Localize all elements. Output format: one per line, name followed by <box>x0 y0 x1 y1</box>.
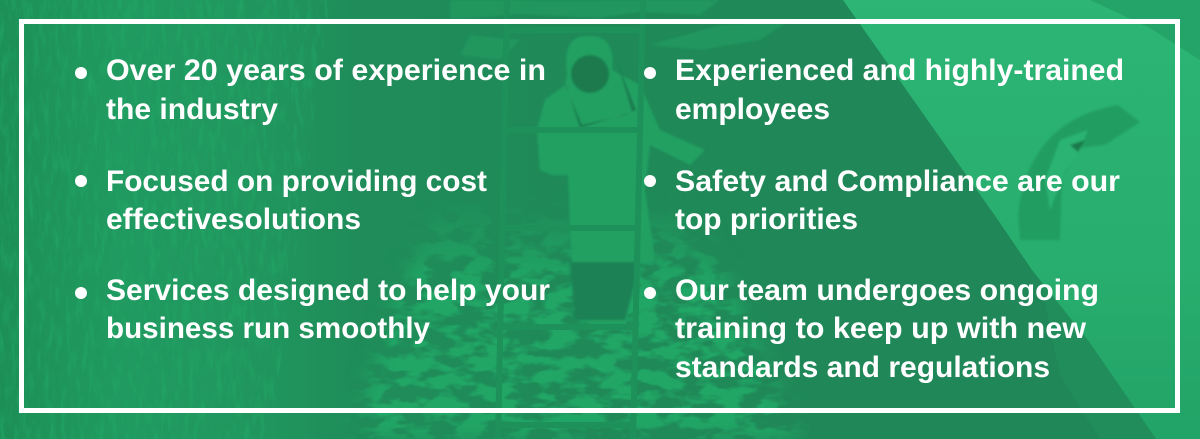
bullet: safety and compliance: top priorities <box>675 203 858 236</box>
bullet: services: business run smoothly <box>106 312 430 345</box>
hose stain <box>1018 105 1140 240</box>
bullet: safety and compliance <box>644 165 1120 236</box>
bullet: safety and compliance: Safety and Compliance are our <box>675 165 1120 198</box>
bullet: trained employees <box>644 54 1124 126</box>
concrete wall <box>843 0 1200 439</box>
bullet: 20 years experience <box>75 54 546 126</box>
bullet: ongoing training <box>644 274 1099 384</box>
bullet: ongoing training: Our team undergoes ongoing <box>675 274 1099 307</box>
left column of bullets <box>75 54 550 345</box>
bullet: ongoing training: training to keep up with new <box>675 312 1087 345</box>
bullet: 20 years experience: Over 20 years of experience in <box>106 54 546 87</box>
bullet: trained employees: employees <box>675 93 830 126</box>
bullet: ongoing training: standards and regulations <box>675 351 1050 384</box>
bullet: services <box>75 274 550 345</box>
right column of bullets <box>644 54 1124 384</box>
bullet: services: Services designed to help your <box>106 274 550 307</box>
bullet: cost effective solutions: effectivesolutions <box>106 203 361 236</box>
bullet: 20 years experience: the industry <box>106 93 278 126</box>
worker figure <box>537 36 705 330</box>
ladder <box>498 0 643 439</box>
foam on channel floor <box>359 226 798 439</box>
bullet: cost effective solutions <box>75 165 487 236</box>
bullet: trained employees: Experienced and highly-trained <box>675 54 1124 87</box>
grate top right <box>1090 0 1200 60</box>
wall edge shadow <box>1040 280 1156 439</box>
bullet: cost effective solutions: Focused on providing cost <box>106 165 487 198</box>
top foam band <box>450 0 790 60</box>
left wall texture <box>0 0 340 439</box>
